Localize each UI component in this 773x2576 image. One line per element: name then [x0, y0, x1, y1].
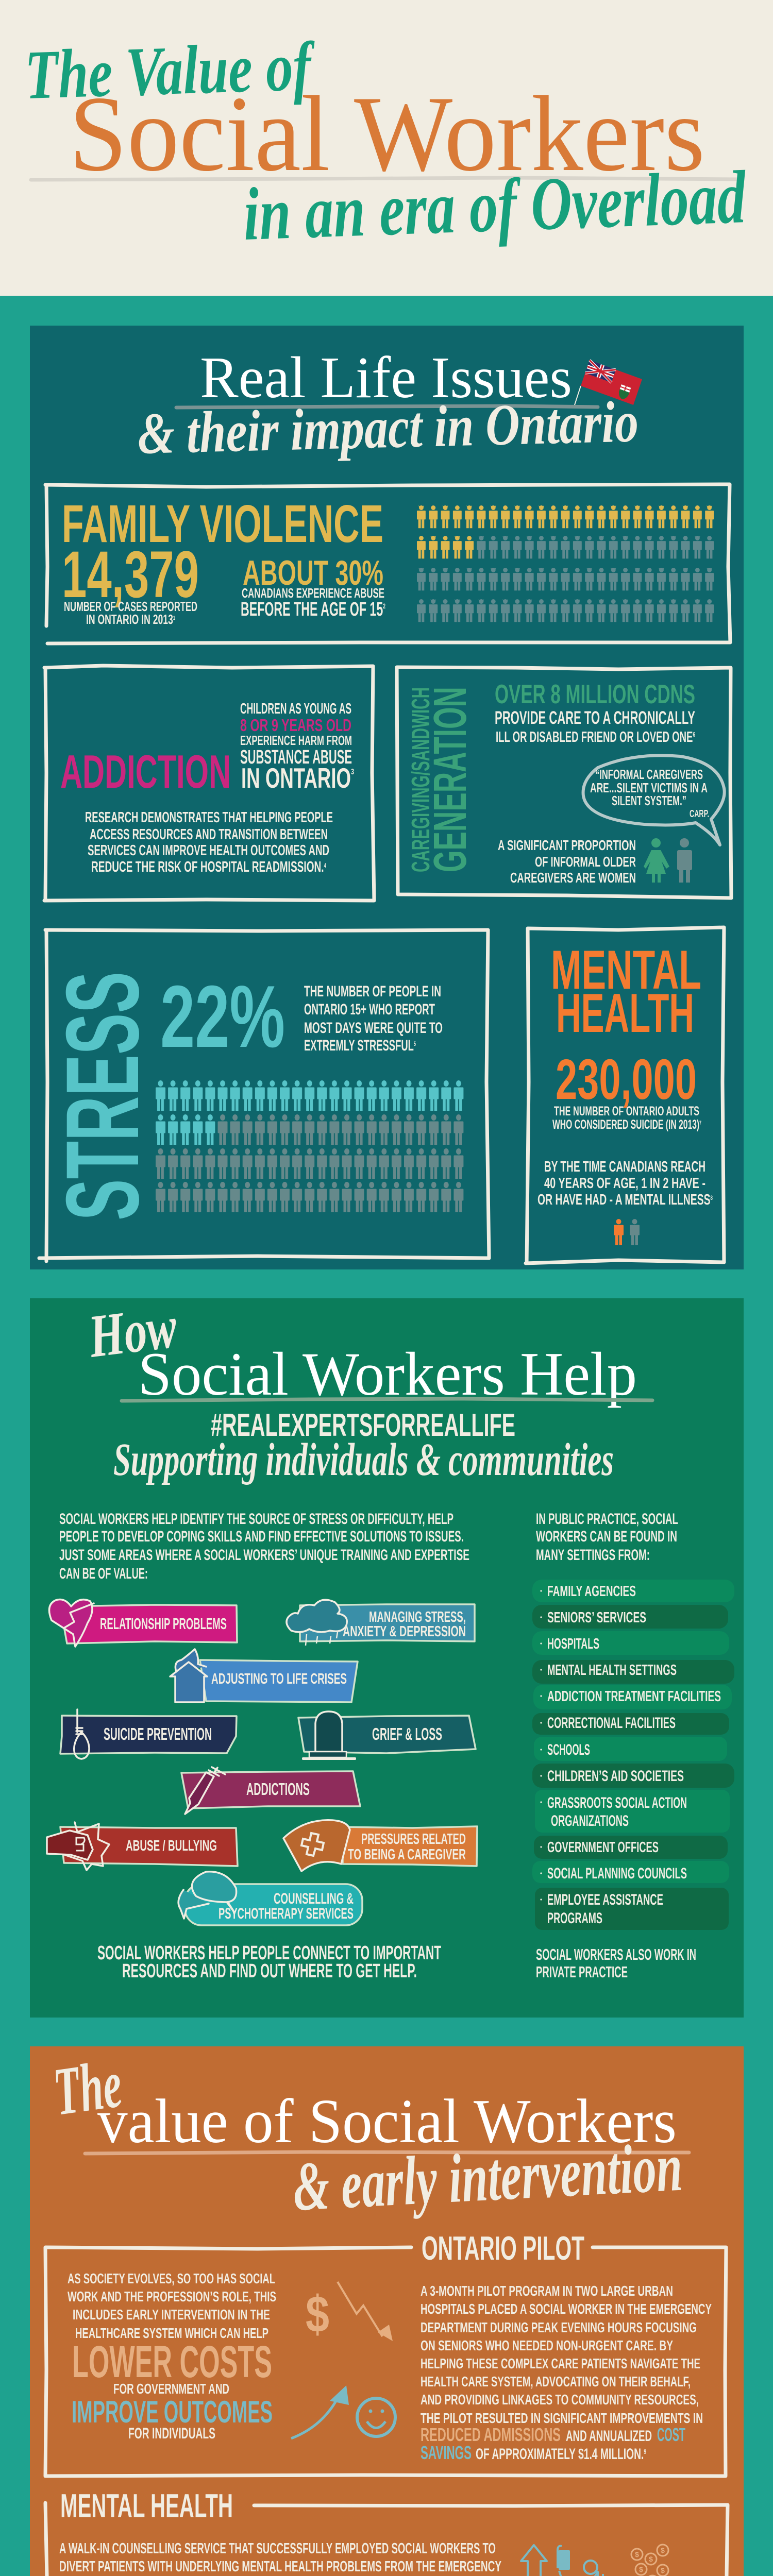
- stat: 230,000: 230,000: [556, 1048, 697, 1111]
- dollar signs in coins: $: [661, 2546, 665, 2554]
- icon: smiley with rising arrow: [291, 2385, 395, 2438]
- text block: lower costs improve outcomes: AS SOCIETY EVOLVES, SO TOO HAS SOCIAL: [68, 2270, 275, 2286]
- panel: stress: [39, 930, 489, 1261]
- text block: children: 3: [351, 768, 354, 776]
- stat: about 30%: ABOUT 30%: [243, 553, 383, 592]
- button: counselling: COUNSELLING &: [274, 1890, 354, 1907]
- header band: [0, 0, 773, 296]
- button: abuse bullying: ABUSE / BULLYING: [126, 1838, 217, 1854]
- text block: research: RESEARCH DEMONSTRATES THAT HELPING PEOPLE: [85, 809, 333, 826]
- text block: women caregivers: A SIGNIFICANT PROPORTION: [498, 837, 636, 853]
- button: managing stress: ANXIETY & DEPRESSION: [343, 1623, 466, 1640]
- button: pressures related to caregiving: TO BEING A CAREGIVER: [348, 1846, 466, 1863]
- text block: stress description: ONTARIO 15+ WHO REPORT: [304, 1001, 435, 1018]
- panel: mental health walk-in: [45, 2487, 728, 2576]
- text block: stress description: 5: [414, 1040, 416, 1047]
- title line: Social Workers: Social Workers: [69, 74, 705, 194]
- icon: dollar with falling arrow: $: [306, 2285, 329, 2343]
- rotated heading: stress: STRESS: [44, 972, 160, 1221]
- dollar signs in coins: $: [639, 2565, 643, 2573]
- speech bubble quote: “INFORMAL CAREGIVERS: [595, 767, 703, 782]
- heading underline: [176, 406, 598, 408]
- text block: lower costs improve outcomes: HEALTHCARE SYSTEM WHICH CAN HELP: [75, 2325, 268, 2341]
- icon: house on fire: [170, 1649, 207, 1702]
- list: settings: EMPLOYEE ASSISTANCE: [547, 1891, 663, 1908]
- button: counselling: PSYCHOTHERAPY SERVICES: [219, 1905, 354, 1922]
- button: counselling: [178, 1872, 362, 1925]
- speech bubble quote: [583, 755, 725, 845]
- button: adjusting to life crises: [170, 1649, 358, 1702]
- text block: pilot description: SAVINGS: [421, 2442, 472, 2463]
- stat: 8 million: 6: [693, 731, 695, 738]
- frame: [45, 484, 730, 643]
- list: settings: CHILDREN’S AID SOCIETIES: [547, 1768, 684, 1785]
- button: managing stress: MANAGING STRESS,: [369, 1609, 466, 1625]
- text block: children: EXPERIENCE HARM FROM: [240, 733, 352, 748]
- button: addictions: ADDICTIONS: [246, 1780, 310, 1799]
- button: managing stress: [287, 1600, 475, 1646]
- text block: one in two: 8: [711, 1194, 713, 1201]
- stat: 14,379 cases: NUMBER OF CASES REPORTED: [64, 599, 197, 614]
- icon: woman: [644, 838, 669, 883]
- list: settings: PROGRAMS: [547, 1910, 602, 1927]
- dollar signs in coins: $: [649, 2555, 653, 2563]
- button: suicide prevention: SUICIDE PREVENTION: [104, 1724, 212, 1743]
- speech bubble quote: ARE...SILENT VICTIMS IN A: [590, 780, 708, 795]
- text block: one in two: [537, 1159, 713, 1208]
- heading: family violence: FAMILY VIOLENCE: [62, 494, 383, 553]
- list: settings: HOSPITALS: [547, 1636, 599, 1652]
- heading: mental health: [551, 939, 701, 1044]
- icon: fist burst: [47, 1822, 109, 1870]
- text block: women caregivers: CAREGIVERS ARE WOMEN: [510, 870, 636, 886]
- text block: pilot description: REDUCED ADMISSIONS: [421, 2424, 561, 2445]
- text block: public practice intro: [536, 1511, 678, 1564]
- stat: 22%: 22%: [160, 968, 285, 1066]
- stat: about 30%: 2: [383, 602, 385, 610]
- subheading: their impact in ontario: & their impact in Ontario: [137, 388, 639, 466]
- frame: [45, 2503, 728, 2576]
- text block: walk-in counselling: A WALK-IN COUNSELLING SERVICE THAT SUCCESSFULLY EMPLOYED SOCIAL WORKERS TO: [59, 2540, 496, 2557]
- rotated heading: caregiving sandwich generation: GENERATION: [425, 687, 476, 872]
- title line: The Value of: The Value of: [24, 28, 317, 114]
- text block: intro: SOCIAL WORKERS HELP IDENTIFY THE SOURCE OF STRESS OR DIFFICULTY, HELP: [59, 1511, 453, 1528]
- panel: family violence: [45, 484, 730, 643]
- heading: how: How: [85, 1293, 181, 1370]
- text block: intro: CAN BE OF VALUE:: [59, 1565, 148, 1582]
- panel: mental health: [526, 927, 724, 1263]
- text block: women caregivers: OF INFORMAL OLDER: [535, 854, 636, 870]
- main title: [24, 28, 748, 256]
- button: addictions: [181, 1767, 360, 1814]
- button: adjusting to life crises: ADJUSTING TO LIFE CRISES: [211, 1671, 347, 1687]
- text block: children: IN ONTARIO: [241, 762, 406, 794]
- heading: social workers help: Social Workers Help: [138, 1340, 637, 1408]
- text block: research: REDUCE THE RISK OF HOSPITAL READMISSION.: [91, 859, 445, 875]
- icon: syringe: [185, 1767, 225, 1814]
- stat: about 30%: [241, 553, 385, 620]
- list: settings: SOCIAL PLANNING COUNCILS: [547, 1865, 687, 1882]
- button: relationship problems: [49, 1599, 237, 1647]
- icon: dollar with falling arrow: [306, 2282, 393, 2343]
- list: settings: CORRECTIONAL FACILITIES: [547, 1715, 676, 1732]
- text block: women caregivers: [498, 837, 636, 886]
- frame: [397, 667, 731, 898]
- text block: private practice: [536, 1945, 696, 1981]
- panel: value and early intervention: [30, 2045, 744, 2576]
- title underline: [31, 178, 742, 180]
- heading: value of social workers: value of Social Workers: [97, 2087, 677, 2156]
- panel: caregiving: [397, 667, 731, 898]
- button: grief and loss: GRIEF & LOSS: [372, 1724, 442, 1743]
- list: settings: SENIORS’ SERVICES: [547, 1609, 646, 1626]
- frame: [45, 2247, 726, 2476]
- text block: pilot description: COST: [657, 2424, 685, 2445]
- text block: public practice intro: MANY SETTINGS FROM:: [536, 1547, 650, 1564]
- text block: lower costs improve outcomes: LOWER COSTS: [72, 2337, 272, 2387]
- text block: intro: PEOPLE TO DEVELOP COPING SKILLS AND FIND EFFECTIVE SOLUTIONS TO ISSUES.: [59, 1528, 464, 1545]
- button: pressures related to caregiving: [283, 1820, 477, 1871]
- heading: mental health: MENTAL: [551, 939, 701, 1001]
- icon: tombstone: [302, 1711, 356, 1760]
- list: settings: ORGANIZATIONS: [551, 1812, 629, 1829]
- icon: two people: [614, 1219, 640, 1245]
- text block: intro: [59, 1511, 469, 1582]
- icon: nurse cap with cross: [283, 1820, 350, 1871]
- speech bubble quote: SILENT SYSTEM.”: [612, 793, 686, 808]
- stat: 14,379 cases: 1: [173, 615, 175, 621]
- text block: connect to resources: RESOURCES AND FIND OUT WHERE TO GET HELP.: [122, 1960, 417, 1982]
- text block: pilot description: AND ANNUALIZED: [566, 2428, 652, 2445]
- text block: intro: JUST SOME AREAS WHERE A SOCIAL WORKERS’ UNIQUE TRAINING AND EXPERTISE: [59, 1547, 469, 1564]
- panel: ontario pilot: [45, 2229, 726, 2476]
- text block: stress description: EXTREMLY STRESSFUL: [304, 1037, 483, 1054]
- icon: noose: [74, 1709, 89, 1759]
- icon: broken heart: [49, 1599, 94, 1647]
- text block: stress description: [304, 983, 443, 1054]
- list: settings: SCHOOLS: [547, 1741, 590, 1758]
- stat: 230,000: THE NUMBER OF ONTARIO ADULTS: [554, 1104, 699, 1118]
- panel: how social workers help: [30, 1293, 744, 2018]
- rotated heading: caregiving sandwich generation: CAREGIVING/SANDWICH: [407, 687, 435, 872]
- text block: public practice intro: WORKERS CAN BE FOUND IN: [536, 1528, 677, 1545]
- text block: walk-in counselling: [59, 2540, 501, 2576]
- stat: 14,379 cases: [62, 538, 199, 627]
- icon: hospital bed: [517, 2545, 603, 2576]
- heading: mental health: HEALTH: [556, 982, 694, 1044]
- button: pressures related to caregiving: PRESSURES RELATED: [361, 1831, 466, 1848]
- text block: lower costs improve outcomes: INCLUDES EARLY INTERVENTION IN THE: [73, 2307, 270, 2323]
- text block: children: CHILDREN AS YOUNG AS: [240, 701, 351, 717]
- pictogram chart: 22 percent of people: [156, 1080, 466, 1212]
- text block: pilot description: [421, 2283, 712, 2463]
- text block: research: 4: [324, 862, 326, 869]
- speech bubble quote: CARP.: [690, 808, 709, 820]
- list: settings: GOVERNMENT OFFICES: [547, 1839, 659, 1856]
- heading: the: The: [49, 2045, 126, 2130]
- text block: connect to resources: [97, 1942, 441, 1982]
- text block: public practice intro: IN PUBLIC PRACTICE, SOCIAL: [536, 1511, 678, 1528]
- stat: about 30%: CANADIANS EXPERIENCE ABUSE: [242, 585, 384, 601]
- icon: man: [677, 838, 692, 883]
- text block: lower costs improve outcomes: IMPROVE OUTCOMES: [72, 2395, 273, 2429]
- text block: one in two: 40 YEARS OF AGE, 1 IN 2 HAVE -: [544, 1175, 705, 1192]
- panel: real life issues: [30, 326, 744, 1269]
- dollar signs in coins: $: [661, 2566, 665, 2574]
- text block: children: 8 OR 9 YEARS OLD: [240, 716, 351, 735]
- text block: pilot description: 9: [644, 2448, 646, 2455]
- text block: lower costs improve outcomes: WORK AND THE PROFESSION’S ROLE, THIS: [68, 2289, 276, 2304]
- frame: [526, 927, 724, 1263]
- dollar signs in coins: $: [635, 2550, 639, 2558]
- list: settings: FAMILY AGENCIES: [547, 1583, 636, 1600]
- text block: connect to resources: SOCIAL WORKERS HELP PEOPLE CONNECT TO IMPORTANT: [97, 1942, 441, 1964]
- text block: research: ACCESS RESOURCES AND TRANSITION BETWEEN: [90, 826, 328, 843]
- heading underline: [122, 1399, 652, 1401]
- hashtag: #REALEXPERTSFORREALLIFE: [211, 1408, 515, 1443]
- stat: 230,000: 7: [699, 1120, 701, 1126]
- stat: about 30%: BEFORE THE AGE OF 15: [241, 599, 474, 620]
- text block: children: SUBSTANCE ABUSE: [240, 747, 352, 768]
- button: relationship problems: RELATIONSHIP PROBLEMS: [100, 1615, 227, 1633]
- heading: addiction: ADDICTION: [60, 746, 231, 798]
- panel: addiction: [44, 666, 374, 901]
- text block: stress description: MOST DAYS WERE QUITE TO: [304, 1020, 443, 1037]
- list: settings: MENTAL HEALTH SETTINGS: [547, 1662, 677, 1679]
- icon: rain cloud: [287, 1600, 347, 1646]
- dollar signs in coins: [635, 2546, 665, 2576]
- text block: children: [240, 701, 354, 794]
- button: abuse bullying: [47, 1822, 238, 1870]
- heading: mental health: MENTAL HEALTH: [60, 2487, 233, 2524]
- stat: 14,379 cases: IN ONTARIO IN 2013: [86, 612, 214, 627]
- text block: pilot description: OF APPROXIMATELY $1.4 MILLION.: [476, 2446, 737, 2463]
- text block: lower costs improve outcomes: [68, 2270, 276, 2442]
- icon: piggy bank with coins: [624, 2545, 679, 2576]
- text block: lower costs improve outcomes: FOR GOVERNMENT AND: [113, 2381, 229, 2397]
- text block: private practice: PRIVATE PRACTICE: [536, 1963, 628, 1981]
- heading: ontario pilot: ONTARIO PILOT: [422, 2229, 584, 2267]
- text block: lower costs improve outcomes: FOR INDIVIDUALS: [128, 2425, 215, 2442]
- frame: [44, 666, 374, 901]
- heading underline: [85, 2152, 689, 2154]
- stat: 230,000: [552, 1048, 701, 1132]
- button: suicide prevention: [60, 1709, 237, 1759]
- icon: speech bubbles: [178, 1872, 237, 1919]
- pictogram chart: 30 percent of people: [417, 505, 717, 622]
- text block: stress description: THE NUMBER OF PEOPLE IN: [304, 983, 441, 1000]
- rotated heading: caregiving sandwich generation: [407, 687, 476, 872]
- stat: 14,379 cases: 14,379: [62, 538, 199, 612]
- frame: [39, 930, 489, 1261]
- stat: 8 million: [495, 680, 695, 745]
- heading: real life issues: Real Life Issues: [200, 345, 572, 410]
- button: grief and loss: [298, 1711, 476, 1760]
- text block: research: [85, 809, 333, 875]
- text block: research: SERVICES CAN IMPROVE HEALTH OUTCOMES AND: [88, 842, 329, 859]
- icon: ontario flag: [575, 360, 642, 405]
- list: settings: [532, 1580, 734, 1930]
- text block: walk-in counselling: DIVERT PATIENTS WITH UNDERLYING MENTAL HEALTH PROBLEMS FROM THE EMERGENCY: [59, 2558, 501, 2575]
